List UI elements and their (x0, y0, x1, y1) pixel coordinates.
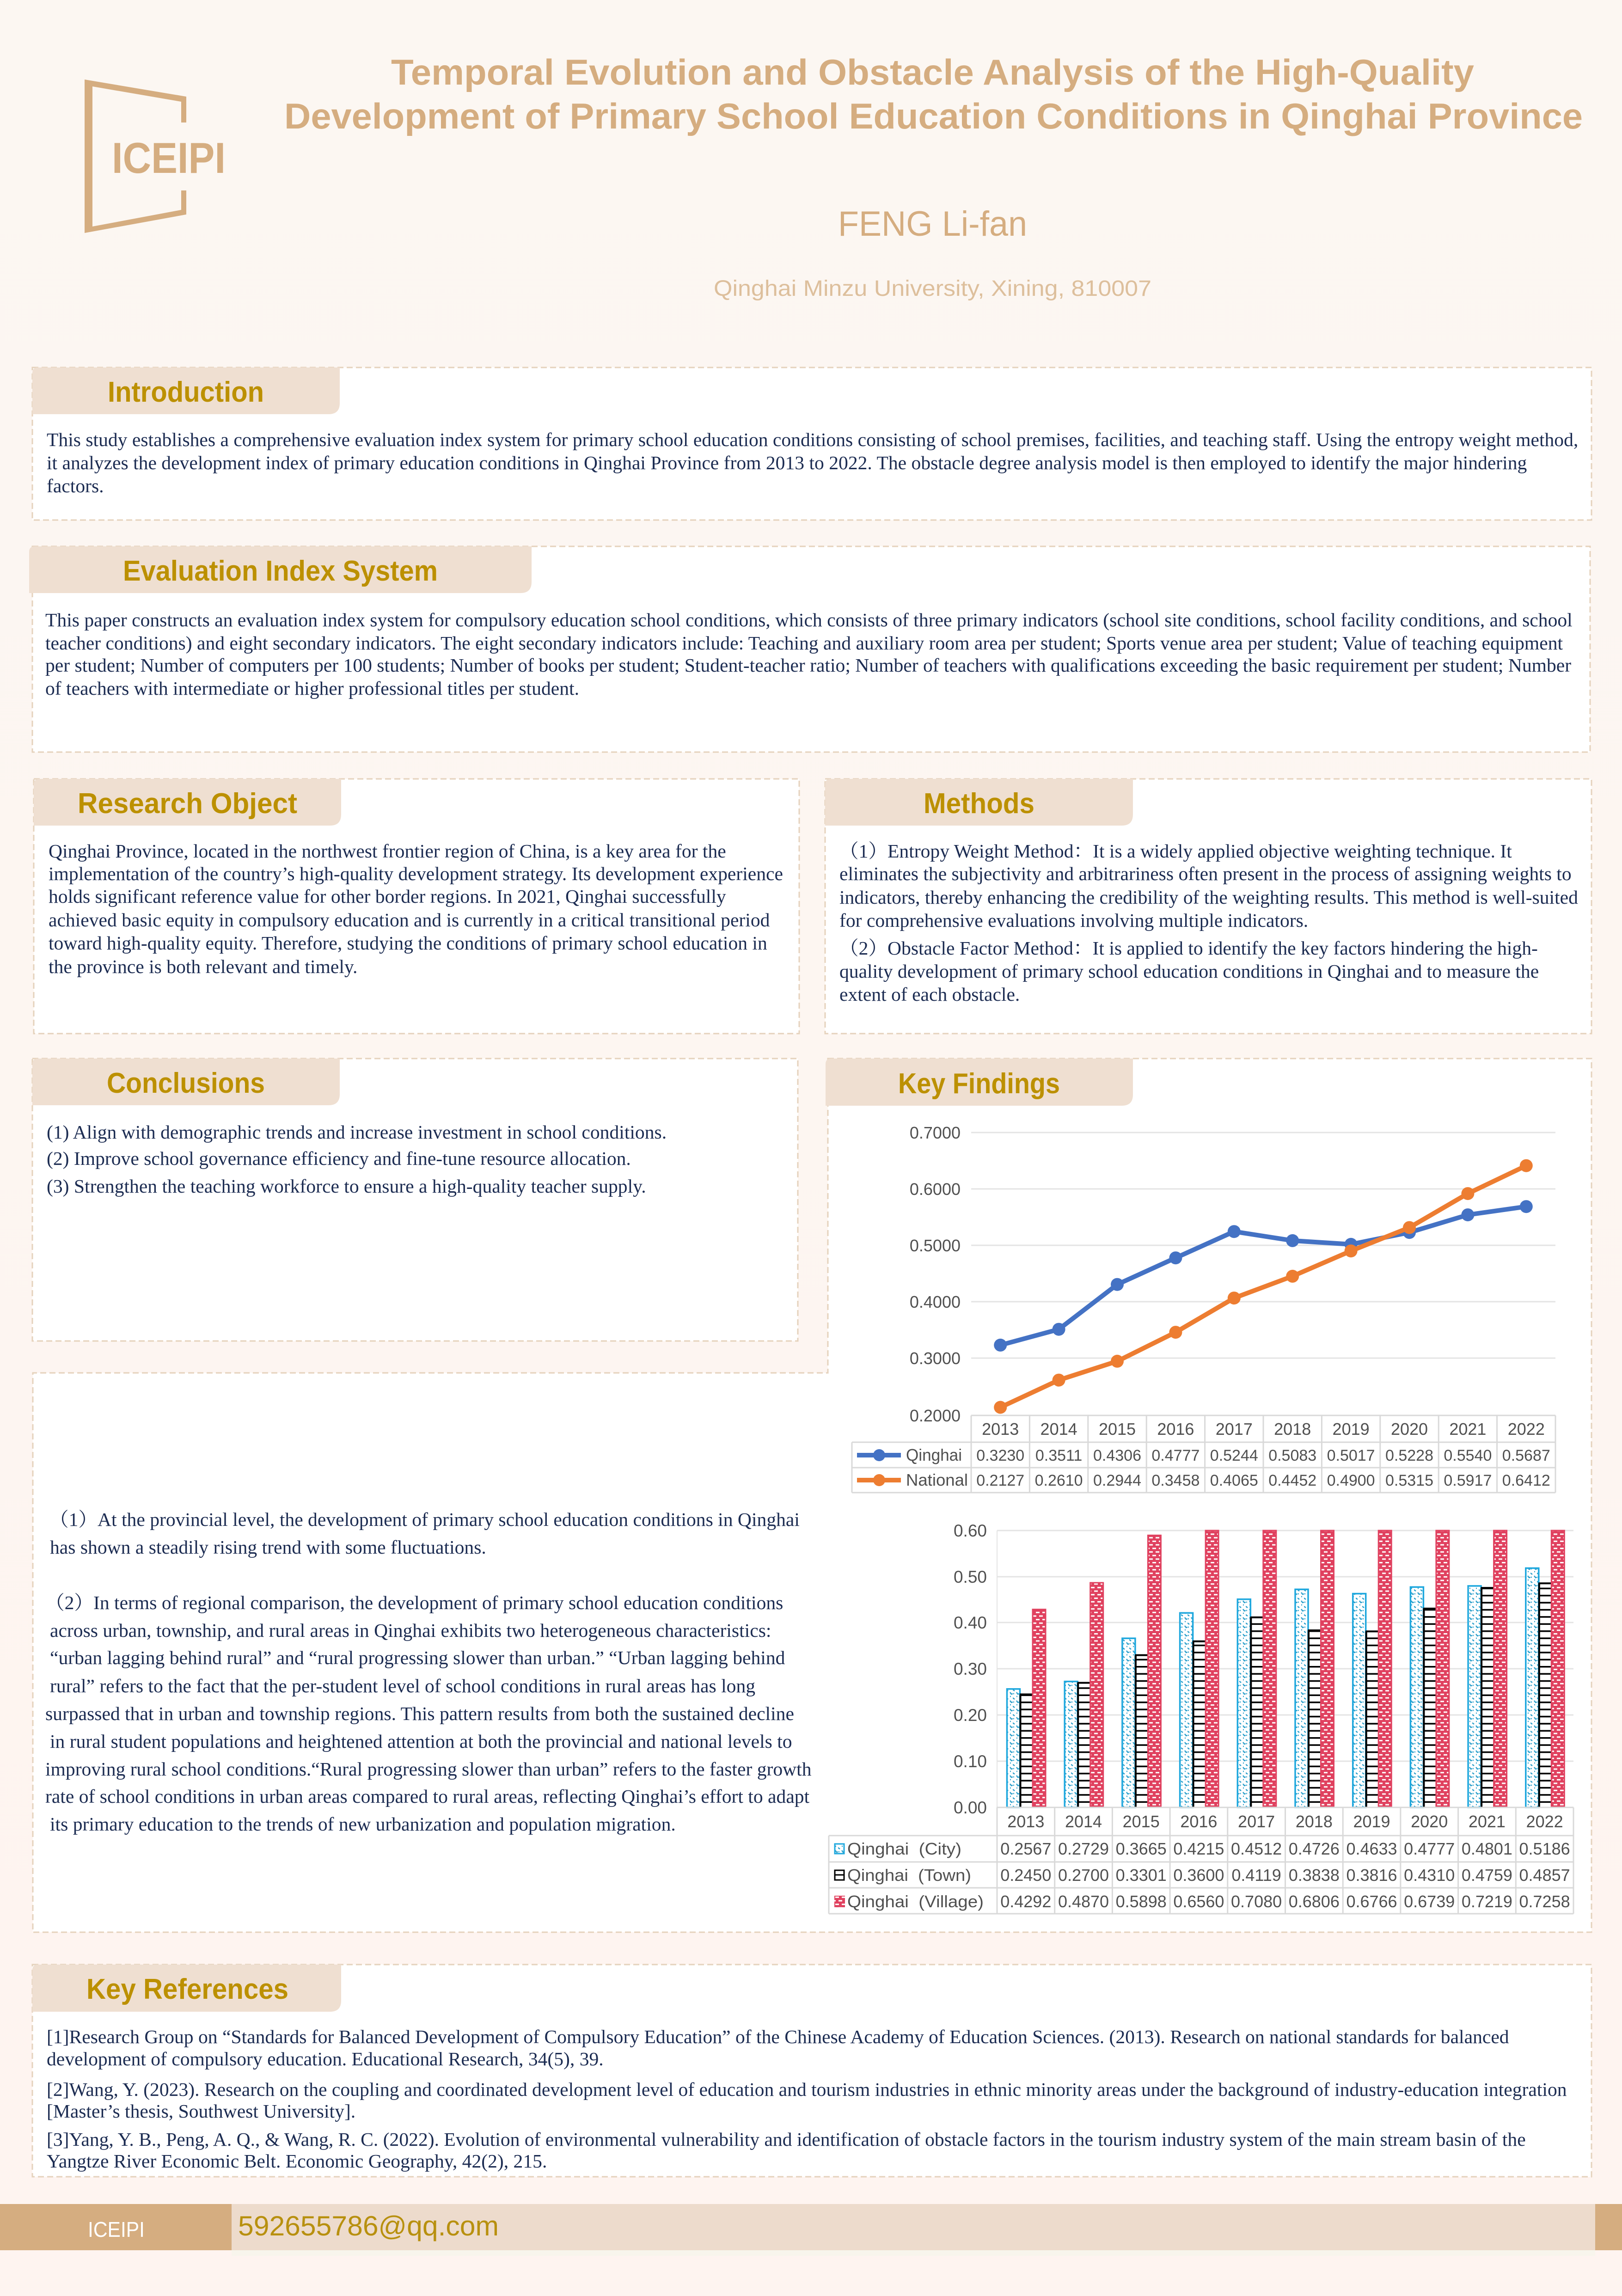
legend key: Qinghai (857, 1445, 962, 1464)
heading: Methods (825, 779, 1133, 826)
text: methods body: indicators, thereby enhancing the credibility of the weighting results. This method is well-suited (839, 887, 1578, 908)
table values: Town: 0.4759 (1462, 1866, 1512, 1885)
series: National (994, 1159, 1533, 1414)
table values: National: 0.2944 (1093, 1472, 1141, 1489)
table values: Village: 0.6560 (1173, 1892, 1224, 1911)
text: evaluation body: teacher conditions) and eight secondary indicators. The eight secondary indicators include: Teaching and auxiliary room area per student; Sports venue area per student; Value of teaching equipment (45, 632, 1563, 654)
y axis labels: 0.40 (954, 1613, 987, 1632)
y axis labels: 0.60 (954, 1521, 987, 1540)
table values: City: 0.4726 (1289, 1839, 1340, 1858)
table years: 2017 (1238, 1812, 1275, 1831)
text: reference list: development of compulsory education. Educational Research, 34(5), 39. (47, 2048, 604, 2070)
text: findings narrative: “urban lagging behind rural” and “rural progressing slower than urban.” “Urban lagging behind (50, 1647, 785, 1668)
text: evaluation body: per student; Number of computers per 100 students; Number of books per student; Student-teacher ratio; Number of teachers with qualifications exceeding the basic requirement per student; Number (45, 655, 1571, 676)
table values: Qinghai: 0.5017 (1327, 1447, 1375, 1464)
table values: National: 0.4452 (1268, 1472, 1316, 1489)
text: methods body: （2）Obstacle Factor Method：It is applied to identify the key factors hindering the high- (839, 937, 1538, 959)
y axis labels: 0.10 (954, 1752, 987, 1771)
table years: 2022 (1526, 1812, 1563, 1831)
table years: 2018 (1296, 1812, 1333, 1831)
text: introduction body: This study establishes a comprehensive evaluation index system for primary school education conditions consisting of school premises, facilities, and teaching staff. Using the entropy weight method, (47, 429, 1578, 450)
table years: 2016 (1157, 1420, 1194, 1439)
legend key: Qinghai: Qinghai (906, 1445, 962, 1464)
text: research object body: Qinghai Province, located in the northwest frontier region of China, is a key area for the (49, 840, 726, 862)
table years: 2013 (1007, 1812, 1044, 1831)
footer bar (0, 2204, 1622, 2256)
table values: City: 0.4215 (1173, 1839, 1224, 1858)
table values: City: 0.3665 (1116, 1839, 1167, 1858)
y axis labels: 0.50 (954, 1567, 987, 1586)
text: methods body: quality development of primary school education conditions in Qinghai and to measure the (839, 961, 1539, 982)
table years: 2013 (982, 1420, 1019, 1439)
text: reference list: [2]Wang, Y. (2023). Research on the coupling and coordinated development level of education and tourism industries in ethnic minority areas under the background of industry-education integration (47, 2079, 1567, 2100)
logo: ICEIPI bracket mark (85, 80, 226, 233)
panel: research object (34, 779, 799, 1034)
panel: methods (825, 779, 1591, 1034)
legend key: City: Qinghai (City) (847, 1839, 961, 1858)
text: research object body: the province is both relevant and timely. (49, 956, 357, 977)
y axis labels: 0.4000 (910, 1292, 961, 1311)
table years: 2014 (1065, 1812, 1102, 1831)
table values: Qinghai: 0.5687 (1502, 1447, 1550, 1464)
table years: 2019 (1353, 1812, 1390, 1831)
table values: City (1000, 1839, 1570, 1858)
table years: 2015 (1123, 1812, 1160, 1831)
table values: Town: 0.2700 (1058, 1866, 1109, 1885)
table values: Qinghai: 0.5083 (1268, 1447, 1316, 1464)
panel: evaluation index system (29, 546, 1590, 752)
heading: Key References: Key References (86, 1973, 288, 2005)
panel: key references (32, 1965, 1591, 2177)
table years: 2022 (1508, 1420, 1545, 1439)
y axis labels (954, 1521, 987, 1817)
y axis labels: 0.30 (954, 1659, 987, 1678)
table values: National: 0.6412 (1502, 1472, 1550, 1489)
legend key: National: National (906, 1470, 968, 1489)
table values: Town: 0.4857 (1519, 1866, 1570, 1885)
heading: Key References (32, 1965, 341, 2012)
legend key: Village: Qinghai (Village) (847, 1892, 984, 1911)
heading: Research Object: Research Object (78, 788, 297, 820)
table years: 2014 (1041, 1420, 1077, 1439)
panel: conclusions (32, 1059, 798, 1341)
text: research object body: implementation of the country’s high-quality development strategy. Its development experience (49, 863, 783, 884)
heading: Conclusions (32, 1059, 340, 1105)
table years: 2015 (1099, 1420, 1136, 1439)
title: Development of Primary School Education Conditions in Qinghai Province (284, 96, 1583, 136)
title: Temporal Evolution and Obstacle Analysis of the High-Quality (391, 52, 1474, 92)
text: findings narrative: surpassed that in urban and township regions. This pattern results from both the sustained decline (45, 1703, 794, 1724)
footer label: ICEIPI: ICEIPI (88, 2217, 145, 2241)
text: evaluation body (45, 609, 1573, 699)
table values: Town: 0.4119 (1231, 1866, 1281, 1885)
affiliation: Qinghai Minzu University, Xining, 810007 (714, 276, 1151, 301)
y axis labels: 0.5000 (910, 1236, 961, 1255)
table values: Village: 0.5898 (1116, 1892, 1167, 1911)
table values: Town: 0.3816 (1346, 1866, 1397, 1885)
table values: City: 0.4512 (1231, 1839, 1282, 1858)
table values: National: 0.2610 (1035, 1472, 1083, 1489)
table years: 2016 (1180, 1812, 1217, 1831)
text: findings narrative: across urban, township, and rural areas in Qinghai exhibits two heterogeneous characteristics: (50, 1620, 771, 1641)
text: methods body: （1）Entropy Weight Method：It is a widely applied objective weighting technique. It (839, 840, 1512, 862)
text: conclusions list: (3) Strengthen the teaching workforce to ensure a high-quality teacher supply. (47, 1176, 646, 1197)
legend key: National (857, 1470, 968, 1489)
heading: Conclusions: Conclusions (107, 1067, 265, 1099)
data table: line chart (852, 1415, 1555, 1493)
heading: Evaluation Index System: Evaluation Index System (123, 555, 438, 587)
table years (1007, 1812, 1563, 1831)
text: findings narrative: has shown a steadily rising trend with some fluctuations. (50, 1537, 486, 1558)
table years: 2021 (1469, 1812, 1506, 1831)
y axis labels: 0.6000 (910, 1180, 961, 1199)
table values: Qinghai: 0.3230 (976, 1447, 1024, 1464)
table values: Qinghai: 0.5540 (1444, 1447, 1492, 1464)
heading: Key Findings: Key Findings (898, 1068, 1060, 1100)
table values: Qinghai: 0.5228 (1385, 1447, 1433, 1464)
table values: Qinghai: 0.5244 (1210, 1447, 1258, 1464)
text: methods body: extent of each obstacle. (839, 984, 1020, 1005)
text: reference list: [3]Yang, Y. B., Peng, A. Q., & Wang, R. C. (2022). Evolution of environmental vulnerability and identification of obstacle factors in the tourism industry system of the main stream basin of the (47, 2129, 1526, 2150)
y axis labels: 0.2000 (910, 1406, 961, 1425)
table values: Qinghai: 0.4777 (1151, 1447, 1200, 1464)
author: FENG Li-fan (838, 204, 1027, 244)
panel: introduction (32, 367, 1591, 520)
text: findings narrative: rural” refers to the fact that the per-student level of school conditions in rural areas has long (50, 1675, 755, 1696)
table values: National: 0.5315 (1385, 1472, 1433, 1489)
footer email: 592655786@qq.com (238, 2210, 499, 2241)
table years (982, 1420, 1545, 1439)
table values: Village: 0.7080 (1231, 1892, 1282, 1911)
line chart: Qinghai vs National (852, 1123, 1555, 1493)
text: reference list (47, 2026, 1567, 2172)
table years: 2021 (1449, 1420, 1486, 1439)
text: research object body: achieved basic equity in compulsory education and is currently in a critical transitional period (49, 909, 770, 931)
text: reference list: Yangtze River Economic Belt. Economic Geography, 42(2), 215. (47, 2150, 547, 2172)
text: conclusions list: (2) Improve school governance efficiency and fine-tune resource allocation. (47, 1148, 631, 1169)
bars: Town (1020, 1583, 1552, 1807)
table values: City: 0.5186 (1519, 1839, 1570, 1858)
heading: Introduction (32, 367, 340, 414)
table values: City: 0.2567 (1000, 1839, 1051, 1858)
table values: Town (1000, 1866, 1570, 1885)
heading: Methods: Methods (924, 788, 1034, 820)
bars: City (1007, 1568, 1539, 1807)
table values: National: 0.4900 (1327, 1472, 1375, 1489)
text: methods body: eliminates the subjectivity and arbitrariness often present in the process of assigning weights to (839, 863, 1572, 884)
heading: Introduction: Introduction (108, 376, 264, 408)
table values: City: 0.2729 (1058, 1839, 1109, 1858)
table values: Town: 0.4310 (1404, 1866, 1455, 1885)
table values: Qinghai (976, 1447, 1550, 1464)
table years: 2018 (1274, 1420, 1311, 1439)
legend key: Town: Qinghai (Town) (847, 1866, 971, 1885)
table values: Village: 0.4870 (1058, 1892, 1109, 1911)
table years: 2020 (1411, 1812, 1448, 1831)
series: Qinghai (994, 1200, 1533, 1352)
text: findings narrative: rate of school conditions in urban areas compared to rural areas, reflecting Qinghai’s effort to adapt (45, 1786, 810, 1807)
text: reference list: [1]Research Group on “Standards for Balanced Development of Compulsory Education” of the Chinese Academy of Education Sciences. (2013). Research on national standards for balanced (47, 2026, 1509, 2048)
heading: Research Object (34, 779, 341, 826)
table values: National: 0.5917 (1444, 1472, 1492, 1489)
text: research object body: holds significant reference value for other border regions. In 2021, Qinghai successfully (49, 886, 726, 907)
table values: City: 0.4633 (1346, 1839, 1397, 1858)
table years: 2020 (1391, 1420, 1428, 1439)
text: findings narrative: its primary education to the trends of new urbanization and population migration. (50, 1813, 676, 1835)
heading: Key Findings (826, 1059, 1133, 1106)
y axis labels: 0.20 (954, 1706, 987, 1725)
logo: ICEIPI bracket mark: ICEIPI (112, 134, 226, 182)
table values: Village: 0.7258 (1519, 1892, 1570, 1911)
text: research object body: toward high-quality equity. Therefore, studying the conditions of primary school education in (49, 932, 767, 954)
y axis labels (910, 1123, 961, 1425)
title (284, 52, 1583, 136)
table values: Town: 0.3838 (1289, 1866, 1340, 1885)
y axis labels: 0.3000 (910, 1349, 961, 1368)
table values: Village: 0.6739 (1404, 1892, 1455, 1911)
table values: Town: 0.3301 (1116, 1866, 1167, 1885)
text: evaluation body: This paper constructs an evaluation index system for compulsory education school conditions, which consists of three primary indicators (school site conditions, school facility conditions, and school (45, 609, 1573, 631)
bar chart: Qinghai city, town, village (829, 1521, 1573, 1914)
table values: Town: 0.3600 (1173, 1866, 1224, 1885)
table values: Village: 0.7219 (1462, 1892, 1512, 1911)
table years: 2019 (1333, 1420, 1370, 1439)
table values: City: 0.4777 (1404, 1839, 1455, 1858)
text: findings narrative (45, 1509, 812, 1835)
text: introduction body: it analyzes the development index of primary education conditions in Qinghai Province from 2013 to 2022. The obstacle degree analysis model is then employed to identify the major hindering (47, 452, 1527, 473)
text: findings narrative: （1）At the provincial level, the development of primary school education conditions in Qinghai (49, 1509, 800, 1530)
table values: Qinghai: 0.4306 (1093, 1447, 1141, 1464)
table values: Qinghai: 0.3511 (1035, 1447, 1082, 1464)
text: methods body: for comprehensive evaluations involving multiple indicators. (839, 910, 1308, 931)
heading: Evaluation Index System (29, 546, 532, 593)
text: findings narrative: in rural student populations and heightened attention at both the provincial and national levels to (50, 1731, 792, 1752)
y axis labels: 0.7000 (910, 1123, 961, 1142)
table values: Village: 0.6806 (1289, 1892, 1340, 1911)
table values: Village: 0.4292 (1000, 1892, 1051, 1911)
text: findings narrative: improving rural school conditions.“Rural progressing slower than urban” refers to the faster growth (45, 1758, 812, 1780)
table values: National: 0.2127 (976, 1472, 1024, 1489)
text: introduction body (47, 429, 1578, 496)
text: conclusions list (47, 1121, 667, 1197)
text: methods body (839, 840, 1578, 1005)
table years: 2017 (1216, 1420, 1253, 1439)
bars: Village (1033, 1531, 1564, 1807)
text: findings narrative: （2）In terms of regional comparison, the development of primary school education conditions (45, 1592, 783, 1613)
data table: bar chart (829, 1807, 1573, 1914)
table values: Village (1000, 1892, 1570, 1911)
table values: National (976, 1472, 1550, 1489)
text: reference list: [Master’s thesis, Southwest University]. (47, 2100, 355, 2122)
text: research object body (49, 840, 783, 977)
table values: National: 0.3458 (1151, 1472, 1200, 1489)
text: introduction body: factors. (47, 475, 104, 496)
text: evaluation body: of teachers with intermediate or higher professional titles per student. (45, 678, 579, 699)
text: conclusions list: (1) Align with demographic trends and increase investment in school conditions. (47, 1121, 667, 1143)
y axis labels: 0.00 (954, 1798, 987, 1817)
table values: City: 0.4801 (1462, 1839, 1512, 1858)
table values: Town: 0.2450 (1000, 1866, 1051, 1885)
panel: key findings (33, 1059, 1591, 1932)
table values: National: 0.4065 (1210, 1472, 1258, 1489)
table values: Village: 0.6766 (1346, 1892, 1397, 1911)
